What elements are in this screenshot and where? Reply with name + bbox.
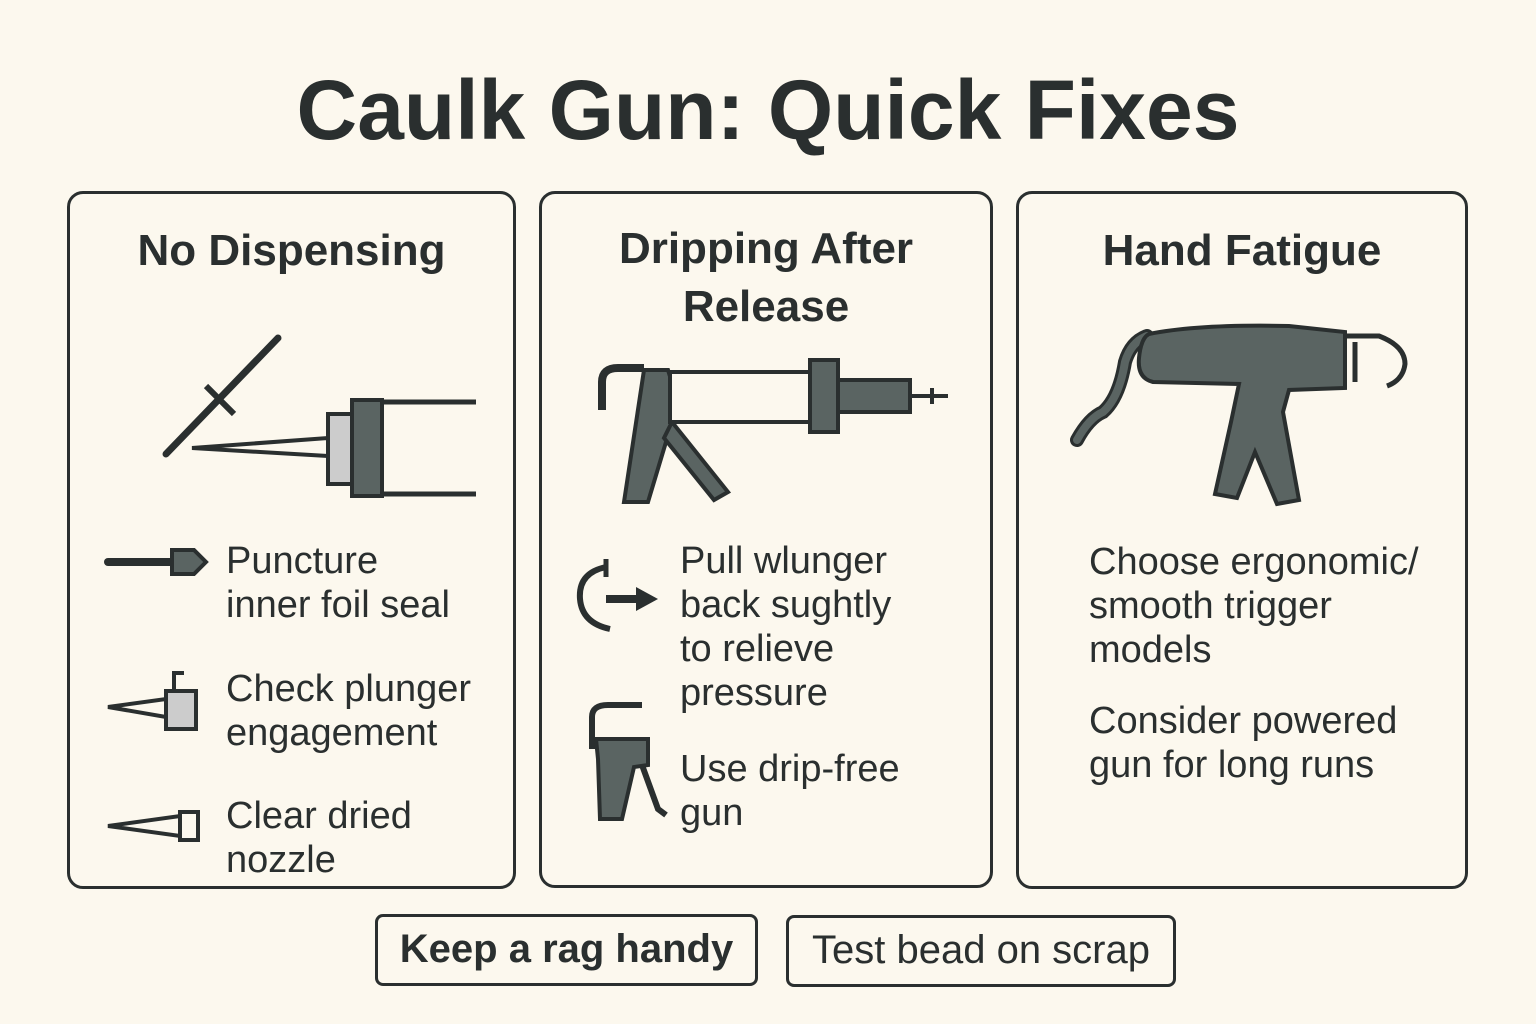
heading: hand fatigue: Hand Fatigue <box>1103 226 1381 275</box>
icon: tube with pick <box>162 334 476 498</box>
item: pull plunger: to relieve <box>680 628 834 670</box>
text: powered <box>1089 700 1397 786</box>
panel: dripping <box>539 191 993 888</box>
text: ergonomic <box>1089 541 1419 671</box>
button: rag <box>375 914 758 986</box>
item: drip-free gun <box>589 702 900 834</box>
button: rag: Keep a rag handy <box>400 927 733 971</box>
heading: no dispensing: No Dispensing <box>137 226 446 275</box>
item: puncture: inner foil seal <box>226 584 450 626</box>
title: Caulk Gun: Quick Fixes <box>297 63 1239 157</box>
item: pull plunger: back sughtly <box>680 584 891 626</box>
item: nozzle: nozzle <box>226 839 336 881</box>
button: test bead <box>786 915 1176 987</box>
heading: dripping: Dripping After <box>619 224 913 273</box>
icon: caulk gun <box>598 358 948 504</box>
item: nozzle: Clear dried <box>226 795 412 837</box>
panel: hand fatigue <box>1016 191 1468 889</box>
item: nozzle <box>108 795 412 881</box>
heading: dripping: Release <box>683 282 849 331</box>
item: puncture <box>104 540 450 626</box>
panel: no dispensing <box>67 191 516 889</box>
text: powered: gun for long runs <box>1089 744 1374 786</box>
text: ergonomic: smooth trigger <box>1089 585 1332 627</box>
icon: powered gun <box>1070 324 1408 506</box>
item: plunger: Check plunger <box>226 668 471 710</box>
button: test bead: Test bead on scrap <box>812 928 1150 972</box>
item: plunger: engagement <box>226 712 437 754</box>
item: puncture: Puncture <box>226 540 378 582</box>
text: powered: Consider powered <box>1089 700 1397 742</box>
item: pull plunger: Pull wlunger <box>680 540 887 582</box>
heading: dripping <box>619 224 913 331</box>
item: drip-free gun: Use drip-free <box>680 748 900 790</box>
item: drip-free gun: gun <box>680 792 743 834</box>
text: ergonomic: models <box>1089 629 1212 671</box>
item: plunger <box>108 668 471 754</box>
item: pull plunger: pressure <box>680 672 828 714</box>
text: ergonomic: Choose ergonomic/ <box>1089 541 1419 583</box>
item: pull plunger <box>576 540 892 714</box>
